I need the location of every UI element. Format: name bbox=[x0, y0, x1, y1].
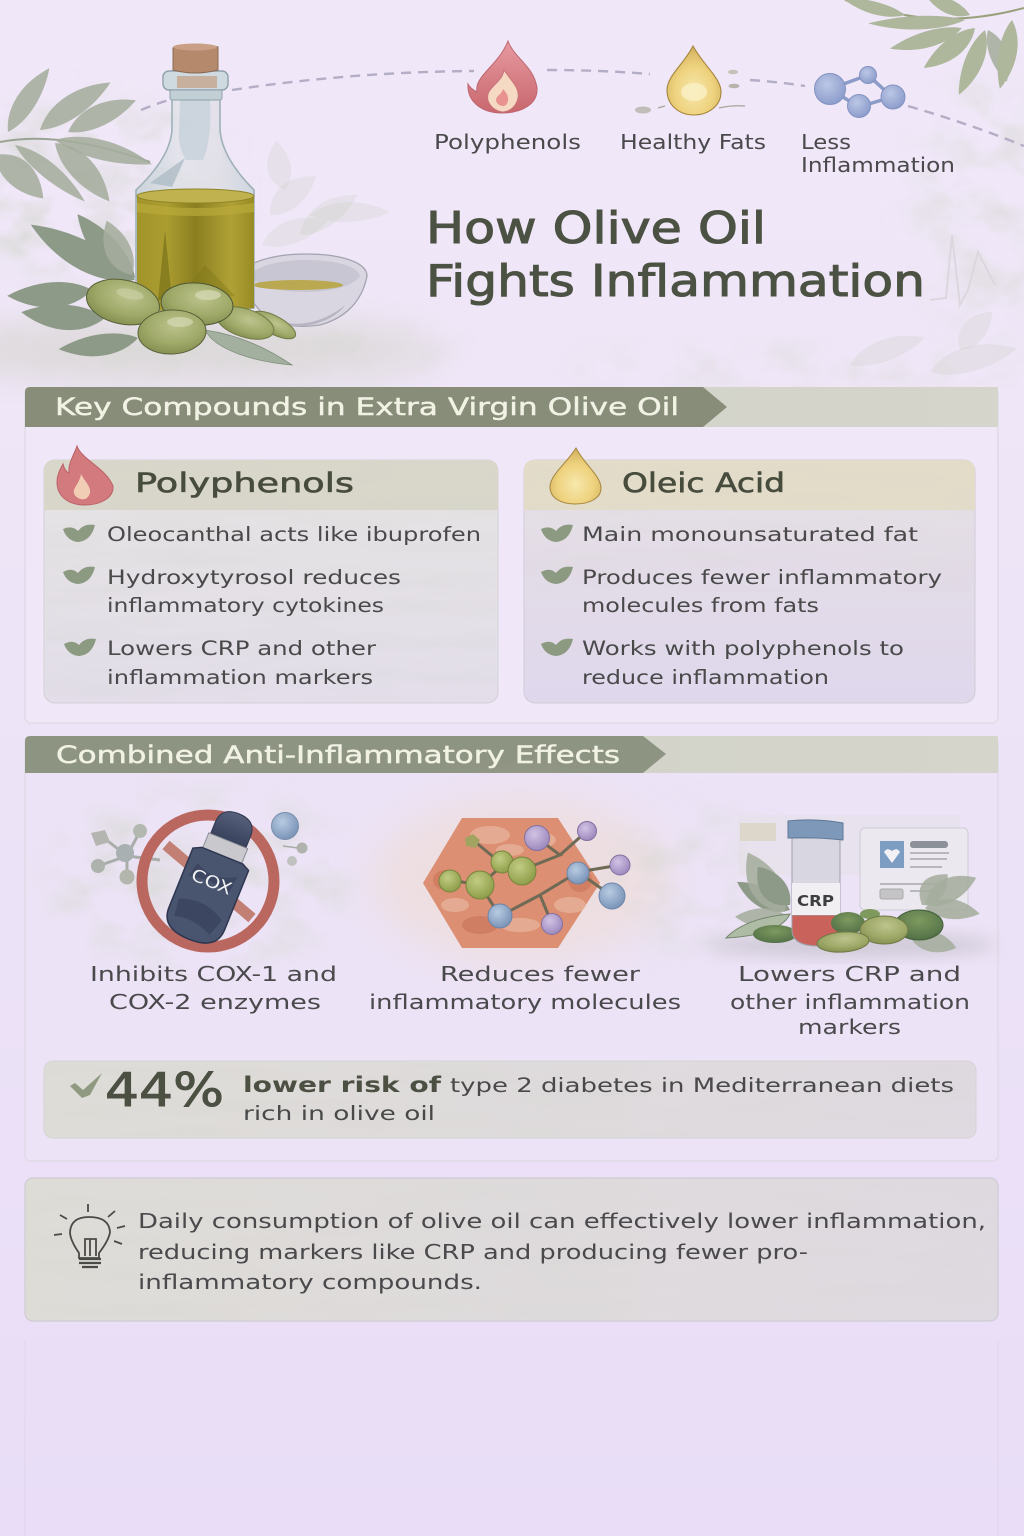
oil bbox=[137, 196, 254, 312]
icon: lightbulb bbox=[54, 1204, 125, 1267]
callout: 44 percent: 44% bbox=[105, 1063, 224, 1117]
icon: oil drop bbox=[635, 46, 745, 115]
list: polyphenols: Lowers CRP and other bbox=[107, 637, 377, 660]
section header band: Key Compounds in Extra Virgin Olive Oil bbox=[55, 393, 679, 421]
list: oleic acid bbox=[582, 523, 942, 689]
icon: reduced molecules hexagon bbox=[423, 818, 630, 948]
list: polyphenols: Hydroxytyrosol reduces bbox=[107, 566, 401, 589]
list: polyphenols: inflammatory cytokines bbox=[107, 594, 384, 617]
icon: left olive branch bbox=[0, 62, 155, 208]
icon: olives and leaves bbox=[6, 207, 299, 365]
icon: flame bbox=[468, 41, 537, 113]
collar bbox=[163, 71, 228, 90]
olives bbox=[895, 910, 943, 940]
icon: molecule bbox=[814, 66, 905, 118]
title: Fights Inflammation bbox=[426, 256, 925, 307]
process labels bbox=[434, 130, 955, 177]
process labels: Healthy Fats bbox=[620, 130, 766, 154]
cork bbox=[173, 44, 218, 73]
process labels: Polyphenols bbox=[434, 130, 581, 154]
list: oleic acid: Main monounsaturated fat bbox=[582, 523, 918, 546]
icon: COX inhibition: COX bbox=[188, 865, 235, 900]
callout: 44 percent: type 2 diabetes in Mediterranean diets bbox=[450, 1074, 954, 1097]
captions: Reduces fewer bbox=[440, 962, 641, 986]
title bbox=[426, 203, 925, 307]
panel: daily tip bbox=[25, 1178, 998, 1321]
tip text: inflammatory compounds. bbox=[138, 1270, 482, 1294]
section header band bbox=[25, 387, 998, 427]
tip text bbox=[138, 1209, 986, 1294]
title: How Olive Oil bbox=[426, 203, 766, 254]
tip text: reducing markers like CRP and producing fewer pro- bbox=[138, 1240, 808, 1264]
icon: CRP vial and report bbox=[726, 815, 981, 956]
list: polyphenols: inflammation markers bbox=[107, 666, 373, 689]
vial: CRP bbox=[797, 892, 834, 910]
captions bbox=[90, 962, 970, 1039]
callout: 44 percent: rich in olive oil bbox=[243, 1102, 435, 1125]
list: oleic acid: reduce inflammation bbox=[582, 666, 829, 689]
card: oleic acid: Oleic Acid bbox=[622, 468, 785, 499]
icon: check marks bbox=[63, 525, 96, 656]
panel: key compounds bbox=[25, 387, 998, 723]
icon: COX inhibition bbox=[91, 803, 308, 950]
icon: small drop bbox=[550, 448, 601, 504]
callout: 44 percent: lower risk of bbox=[243, 1073, 442, 1097]
card: polyphenols bbox=[44, 446, 498, 703]
faint background foliage bbox=[257, 139, 1020, 382]
section header band bbox=[25, 736, 998, 773]
section header band: Combined Anti-Inflammatory Effects bbox=[56, 741, 620, 769]
icon: small flame bbox=[57, 446, 113, 505]
list: polyphenols bbox=[107, 523, 481, 689]
callout: 44 percent bbox=[44, 1061, 976, 1138]
vial bbox=[788, 820, 843, 946]
process labels: Less bbox=[801, 130, 851, 154]
bottle glass bbox=[136, 98, 254, 312]
icon: check marks bbox=[541, 525, 573, 656]
list: oleic acid: molecules from fats bbox=[582, 594, 819, 617]
captions: Inhibits COX-1 and bbox=[90, 962, 337, 986]
icon: oil bowl bbox=[243, 254, 367, 326]
tip text: Daily consumption of olive oil can effectively lower inflammation, bbox=[138, 1209, 986, 1233]
list: oleic acid: Produces fewer inflammatory bbox=[582, 566, 942, 589]
icon group: process row bbox=[468, 41, 905, 118]
list: polyphenols: Oleocanthal acts like ibuprofen bbox=[107, 523, 481, 546]
panel: combined effects bbox=[25, 736, 998, 1161]
card: oleic acid bbox=[524, 448, 975, 703]
report card bbox=[860, 828, 968, 910]
icon: olive oil bottle bbox=[136, 44, 254, 312]
leaves bbox=[732, 875, 794, 920]
captions: markers bbox=[798, 1015, 901, 1039]
card: polyphenols: Polyphenols bbox=[135, 468, 354, 499]
captions: COX-2 enzymes bbox=[109, 990, 321, 1014]
process labels: Inflammation bbox=[801, 153, 955, 177]
captions: other inflammation bbox=[730, 990, 970, 1014]
icon: top-right olive branch bbox=[840, 0, 1024, 99]
captions: inflammatory molecules bbox=[369, 990, 681, 1014]
dashed pathway line bbox=[141, 70, 1024, 146]
watercolor wash bbox=[50, 795, 995, 965]
captions: Lowers CRP and bbox=[738, 962, 961, 986]
list: oleic acid: Works with polyphenols to bbox=[582, 637, 904, 660]
